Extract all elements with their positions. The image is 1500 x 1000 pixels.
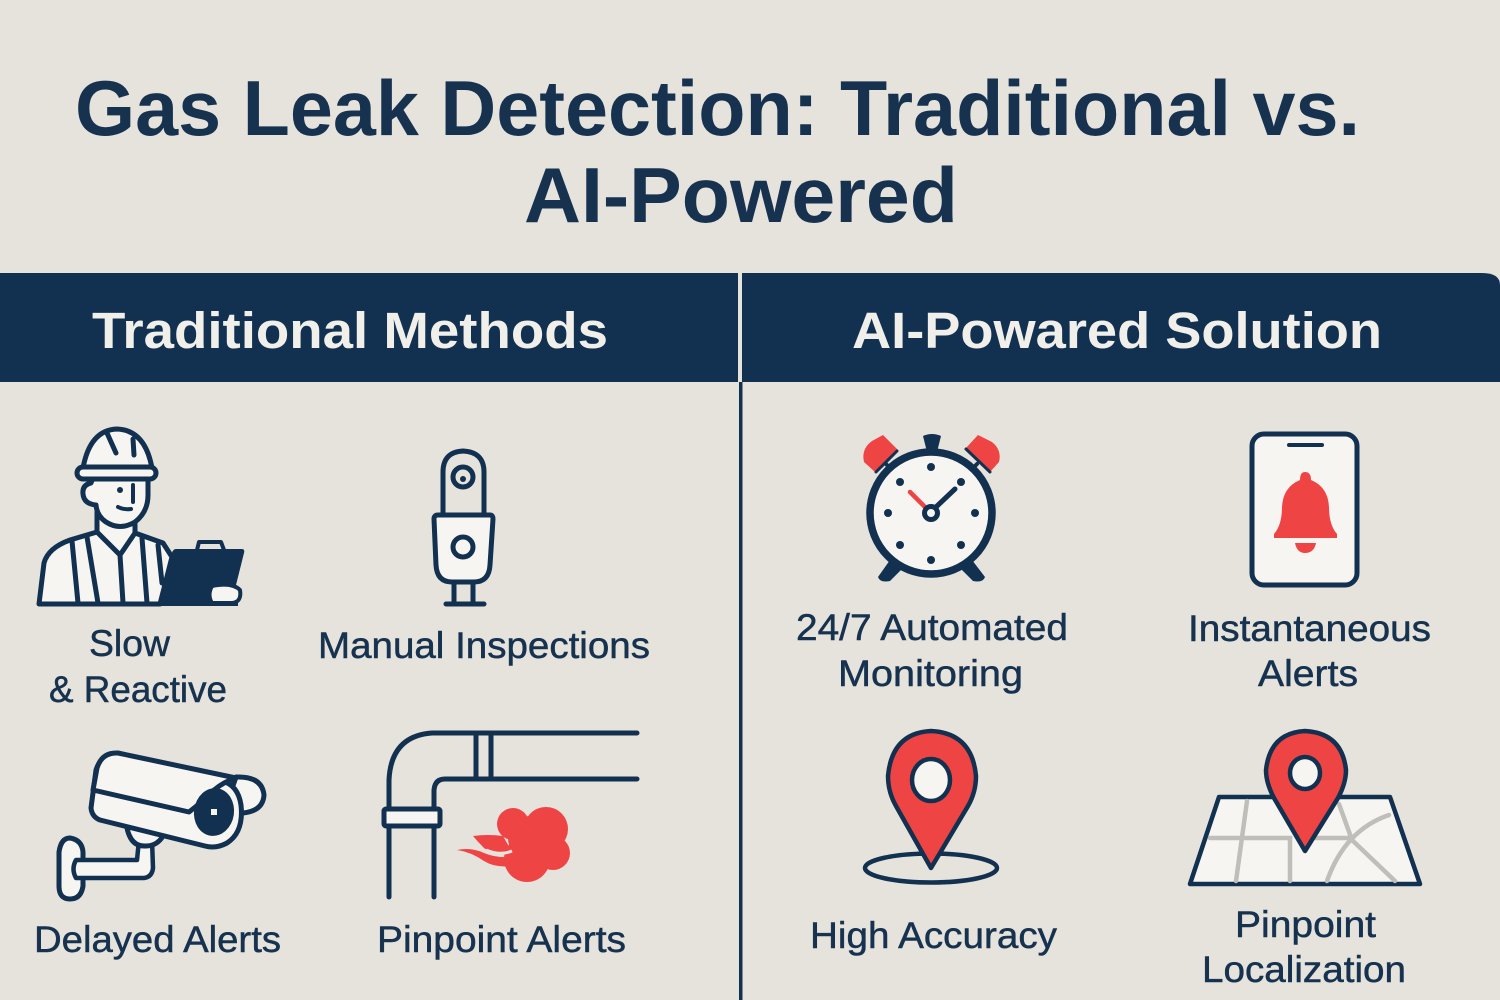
icon: inspector worker [38, 429, 244, 606]
icon: location pin on target ring [865, 731, 997, 882]
label: slow and reactive [49, 623, 227, 710]
gas cloud [457, 807, 570, 882]
label: 24/7 automated monitoring: Monitoring [838, 653, 1023, 694]
heading: traditional methods: Traditional Methods [92, 302, 608, 359]
label: high accuracy: High Accuracy [810, 915, 1058, 956]
icon: security camera [59, 753, 264, 899]
label: instantaneous alerts [1188, 608, 1431, 694]
label: instantaneous alerts: Alerts [1258, 653, 1358, 694]
icon: alarm clock [863, 434, 1000, 582]
icon: phone with alert bell [1252, 434, 1357, 585]
title: Gas Leak Detection: Traditional vs. [75, 64, 1360, 152]
label: slow and reactive: & Reactive [49, 669, 227, 710]
label: pinpoint localization: Pinpoint [1235, 904, 1377, 945]
icon: pin on map [1190, 731, 1420, 884]
label: 24/7 automated monitoring: 24/7 Automated [796, 607, 1068, 648]
title [75, 64, 1360, 239]
heading: AI-powered solution: AI-Powared Solution [852, 302, 1382, 359]
title: AI-Powered [524, 151, 958, 239]
header band [0, 273, 1500, 382]
label: delayed alerts: Delayed Alerts [34, 919, 281, 960]
icon: leaking pipe with gas cloud [384, 733, 637, 897]
label: pinpoint localization: Localization [1202, 949, 1406, 990]
icon: handheld gas sensor [434, 451, 493, 604]
label: manual inspections: Manual Inspections [318, 625, 650, 666]
panel: AI-powered solution [796, 434, 1431, 990]
label: pinpoint alerts: Pinpoint Alerts [377, 919, 626, 960]
panel: traditional methods [34, 429, 650, 960]
label: slow and reactive: Slow [89, 623, 170, 664]
label: instantaneous alerts: Instantaneous [1188, 608, 1431, 649]
label: pinpoint localization [1202, 904, 1406, 990]
label: 24/7 automated monitoring [796, 607, 1068, 694]
